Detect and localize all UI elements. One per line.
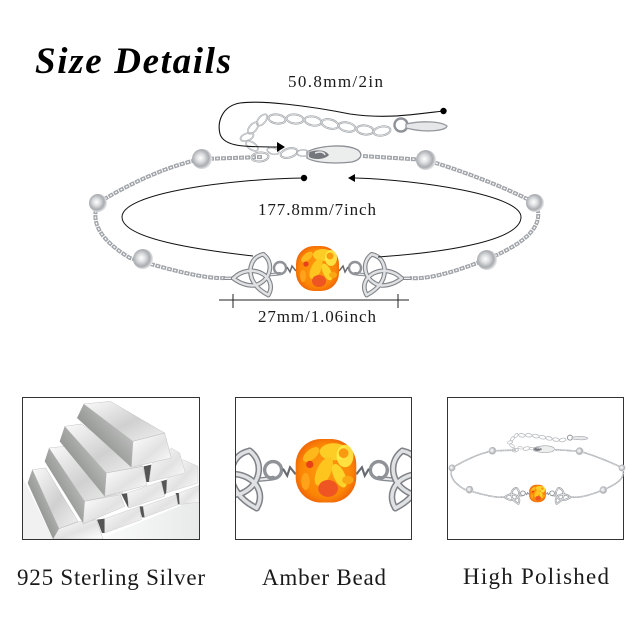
length arrow: extender — [219, 102, 447, 152]
panel: high polished bracelet — [448, 398, 626, 540]
caption: silver: 925 Sterling Silver — [17, 565, 205, 590]
dimension line — [219, 294, 409, 308]
label: bracelet length: 177.8mm/7inch — [258, 200, 376, 219]
panel: silver bars — [22, 398, 200, 540]
panel: amber bead — [235, 397, 412, 540]
title: Size Details — [35, 41, 231, 82]
label: extender length: 50.8mm/2in — [288, 72, 384, 91]
bracelet main image — [89, 112, 544, 295]
caption: polished: High Polished — [463, 564, 610, 589]
caption: amber: Amber Bead — [262, 565, 386, 590]
length arrow: bracelet — [122, 174, 521, 257]
label: charm width: 27mm/1.06inch — [258, 307, 376, 326]
